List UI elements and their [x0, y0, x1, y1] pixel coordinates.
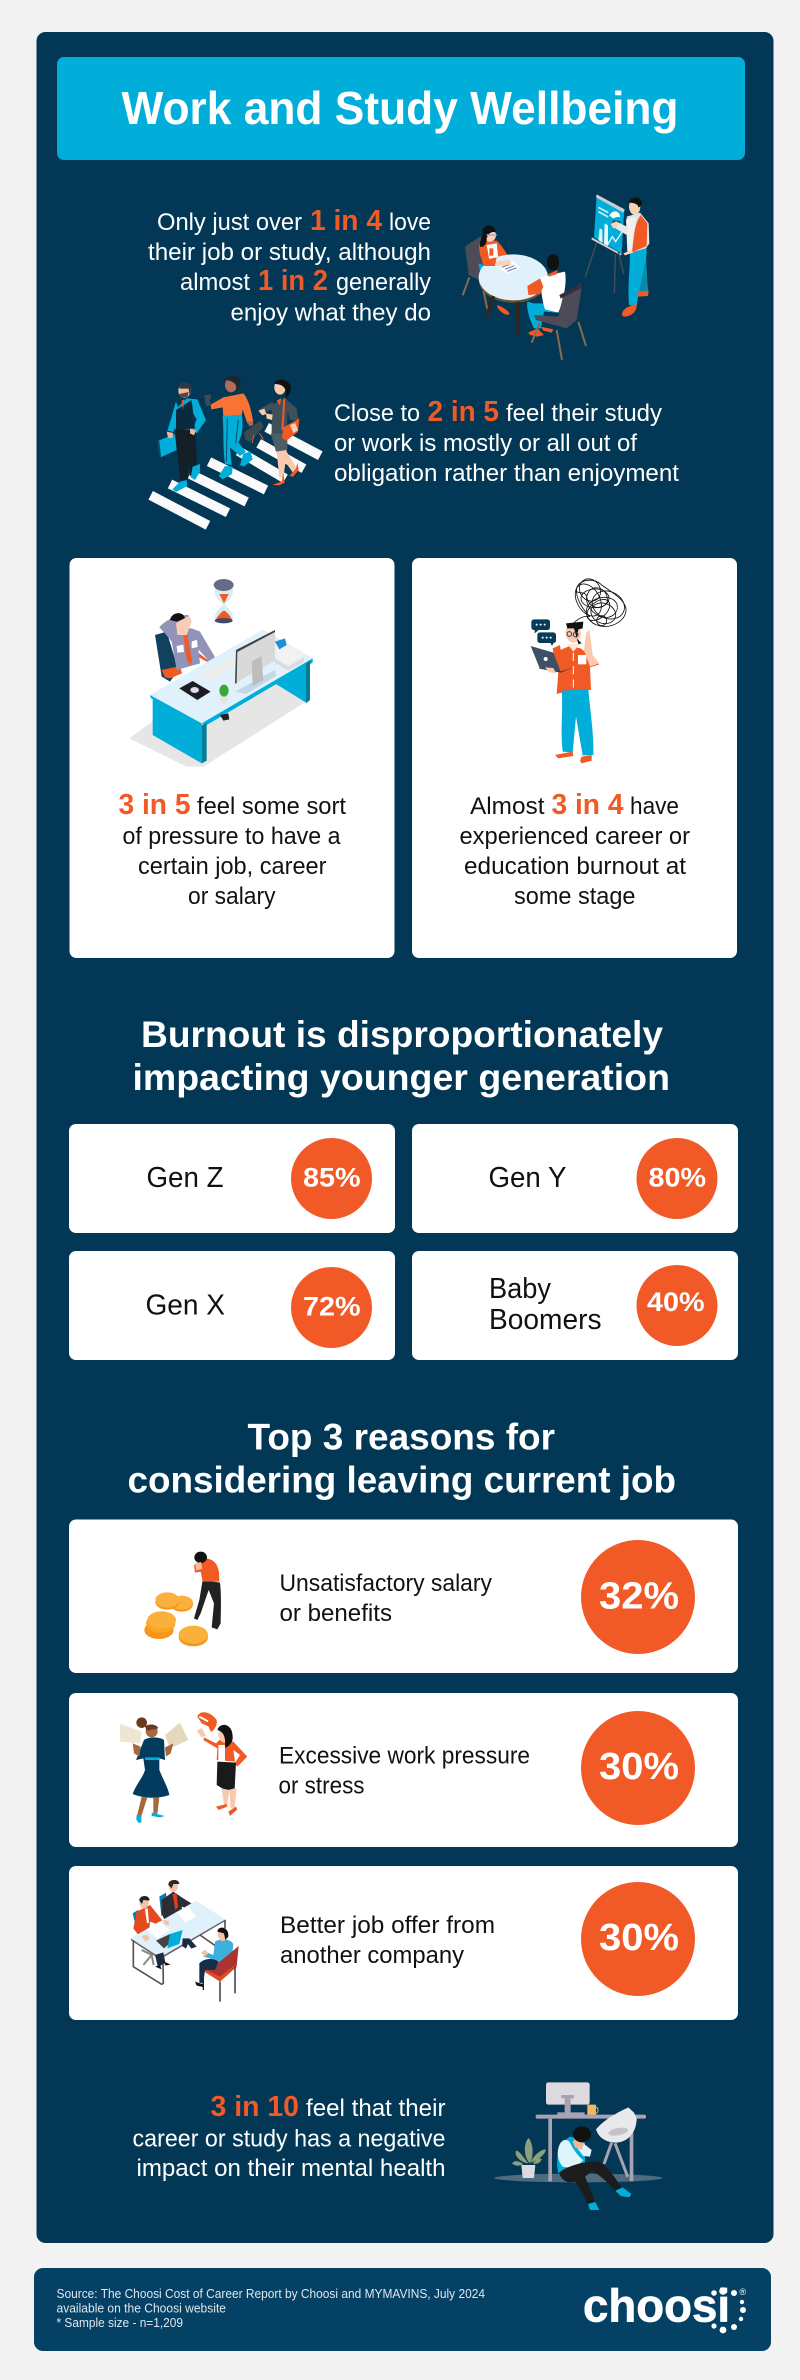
- card: Gen Z 85%: [69, 1124, 395, 1233]
- text: almost 3 in 4 burnout: education burnout at: [464, 853, 686, 880]
- heading: top 3 reasons: considering leaving current job: [128, 1460, 676, 1500]
- text block: 1 in 4 love their job: enjoy what they do: [230, 300, 431, 326]
- text block: 3 in 10 mental health: feel that their: [306, 2095, 446, 2122]
- card: 3 in 4 burnout: [412, 558, 737, 958]
- source note: available on the Choosi website: [56, 2302, 226, 2316]
- card: unsatisfactory salary 32%: 32%: [599, 1576, 679, 1618]
- text: 3 in 5 feel pressure: of pressure to have a: [122, 823, 341, 850]
- text block: 2 in 5 obligation: [334, 396, 679, 487]
- text: unsatisfactory salary: Unsatisfactory salary: [280, 1570, 492, 1597]
- text block: 2 in 5 obligation: feel their study: [506, 400, 662, 427]
- text block: 3 in 10 mental health: career or study has a negative: [132, 2126, 446, 2152]
- text: unsatisfactory salary: or benefits: [280, 1600, 392, 1627]
- card: Baby Boomers 40%: [412, 1251, 738, 1360]
- text: unsatisfactory salary: [280, 1570, 492, 1627]
- card: Gen X 72%: 72%: [303, 1292, 360, 1322]
- card: Gen Z 85%: Gen Z: [146, 1162, 224, 1194]
- card: Baby Boomers 40%: Boomers: [489, 1304, 602, 1336]
- icon: coins and sad man: [144, 1552, 221, 1646]
- text block: 1 in 4 love their job: 1 in 2: [258, 265, 328, 297]
- text: excessive work pressure: or stress: [278, 1772, 364, 1800]
- card: work pressure 30%: 30%: [599, 1746, 679, 1788]
- text: better job offer: another company: [280, 1942, 464, 1969]
- text block: 2 in 5 obligation: Close to: [334, 400, 420, 427]
- icon: overwhelmed man with laptop and scribble: [531, 575, 629, 763]
- footer bar: [34, 2268, 771, 2351]
- logo: choosi: ®: [740, 2287, 746, 2297]
- card: 3 in 5 pressure: [70, 558, 394, 958]
- text block: 1 in 4 love their job: [148, 205, 431, 326]
- text block: 1 in 4 love their job: almost: [180, 269, 250, 296]
- card: Gen Y 80%: Gen Y: [488, 1162, 566, 1194]
- text: almost 3 in 4 burnout: some stage: [514, 883, 636, 910]
- text block: 2 in 5 obligation: 2 in 5: [428, 396, 499, 428]
- card: Gen Y 80%: [412, 1124, 738, 1233]
- card: Gen Y 80%: 80%: [648, 1162, 706, 1192]
- card: Gen X 72%: Gen X: [146, 1290, 225, 1322]
- heading: top 3 reasons: Top 3 reasons for: [248, 1416, 555, 1458]
- text: excessive work pressure: [278, 1742, 530, 1800]
- card: better job offer 30%: [69, 1866, 738, 2020]
- source note: * Sample size - n=1,209: [56, 2316, 183, 2330]
- card: Gen X 72%: [69, 1251, 395, 1360]
- text: almost 3 in 4 burnout: [460, 789, 690, 910]
- text block: 1 in 4 love their job: Only just over: [157, 209, 302, 236]
- text block: 2 in 5 obligation: or work is mostly or all out of: [334, 430, 637, 457]
- icon: meeting around a table with presenter: [463, 194, 649, 360]
- logo: choosi: choosi: [583, 2280, 730, 2332]
- card: work pressure 30%: [69, 1693, 738, 1847]
- text: almost 3 in 4 burnout: have: [630, 793, 679, 820]
- text: 3 in 5 feel pressure: 3 in 5: [118, 789, 190, 821]
- card: Baby Boomers 40%: Baby: [489, 1273, 552, 1305]
- heading: burnout by generation: [132, 1014, 670, 1098]
- text: excessive work pressure: Excessive work pressure: [279, 1742, 530, 1770]
- text: 3 in 5 feel pressure: or salary: [188, 883, 276, 910]
- text block: 1 in 4 love their job: love: [389, 209, 431, 236]
- source note: Source: The Choosi Cost of Career Report by Choosi and MYMAVINS, July 2024: [56, 2287, 485, 2301]
- text: almost 3 in 4 burnout: 3 in 4: [552, 789, 624, 821]
- text: better job offer: Better job offer from: [280, 1912, 495, 1939]
- text block: 3 in 10 mental health: 3 in 10: [210, 2091, 299, 2123]
- text block: 1 in 4 love their job: generally: [336, 269, 431, 296]
- card: Gen Z 85%: 85%: [303, 1162, 360, 1192]
- icon: job interview at table: [131, 1880, 239, 2002]
- icon: stressed man at desk with hourglass: [129, 579, 313, 767]
- text: almost 3 in 4 burnout: experienced career or: [460, 823, 690, 850]
- title banner: Work and Study Wellbeing: [122, 82, 678, 134]
- text: almost 3 in 4 burnout: Almost: [470, 793, 545, 820]
- text block: 2 in 5 obligation: obligation rather than enjoyment: [334, 460, 679, 487]
- card: Baby Boomers 40%: 40%: [647, 1287, 704, 1317]
- heading: burnout by generation: impacting younger generation: [132, 1057, 670, 1098]
- text: 3 in 5 feel pressure: feel some sort: [197, 793, 346, 820]
- source note: [56, 2287, 485, 2330]
- card: better job offer 30%: 30%: [599, 1917, 679, 1959]
- text block: 3 in 10 mental health: [132, 2091, 446, 2182]
- text block: 1 in 4 love their job: their job or study, although: [148, 239, 431, 266]
- heading: burnout by generation: Burnout is disproportionately: [141, 1014, 663, 1055]
- icon: distressed person under desk: [494, 2082, 662, 2210]
- text block: 3 in 10 mental health: impact on their mental health: [136, 2155, 446, 2182]
- heading: top 3 reasons: [128, 1416, 676, 1500]
- icon: three people on a crossing: [151, 376, 320, 525]
- text: better job offer: [280, 1912, 495, 1969]
- text: 3 in 5 feel pressure: certain job, career: [138, 853, 327, 880]
- card: unsatisfactory salary 32%: [69, 1520, 738, 1673]
- title banner: [57, 57, 745, 160]
- icon: two women arguing: [120, 1712, 247, 1823]
- text block: 1 in 4 love their job: 1 in 4: [310, 205, 382, 237]
- text: 3 in 5 feel pressure: [118, 789, 346, 910]
